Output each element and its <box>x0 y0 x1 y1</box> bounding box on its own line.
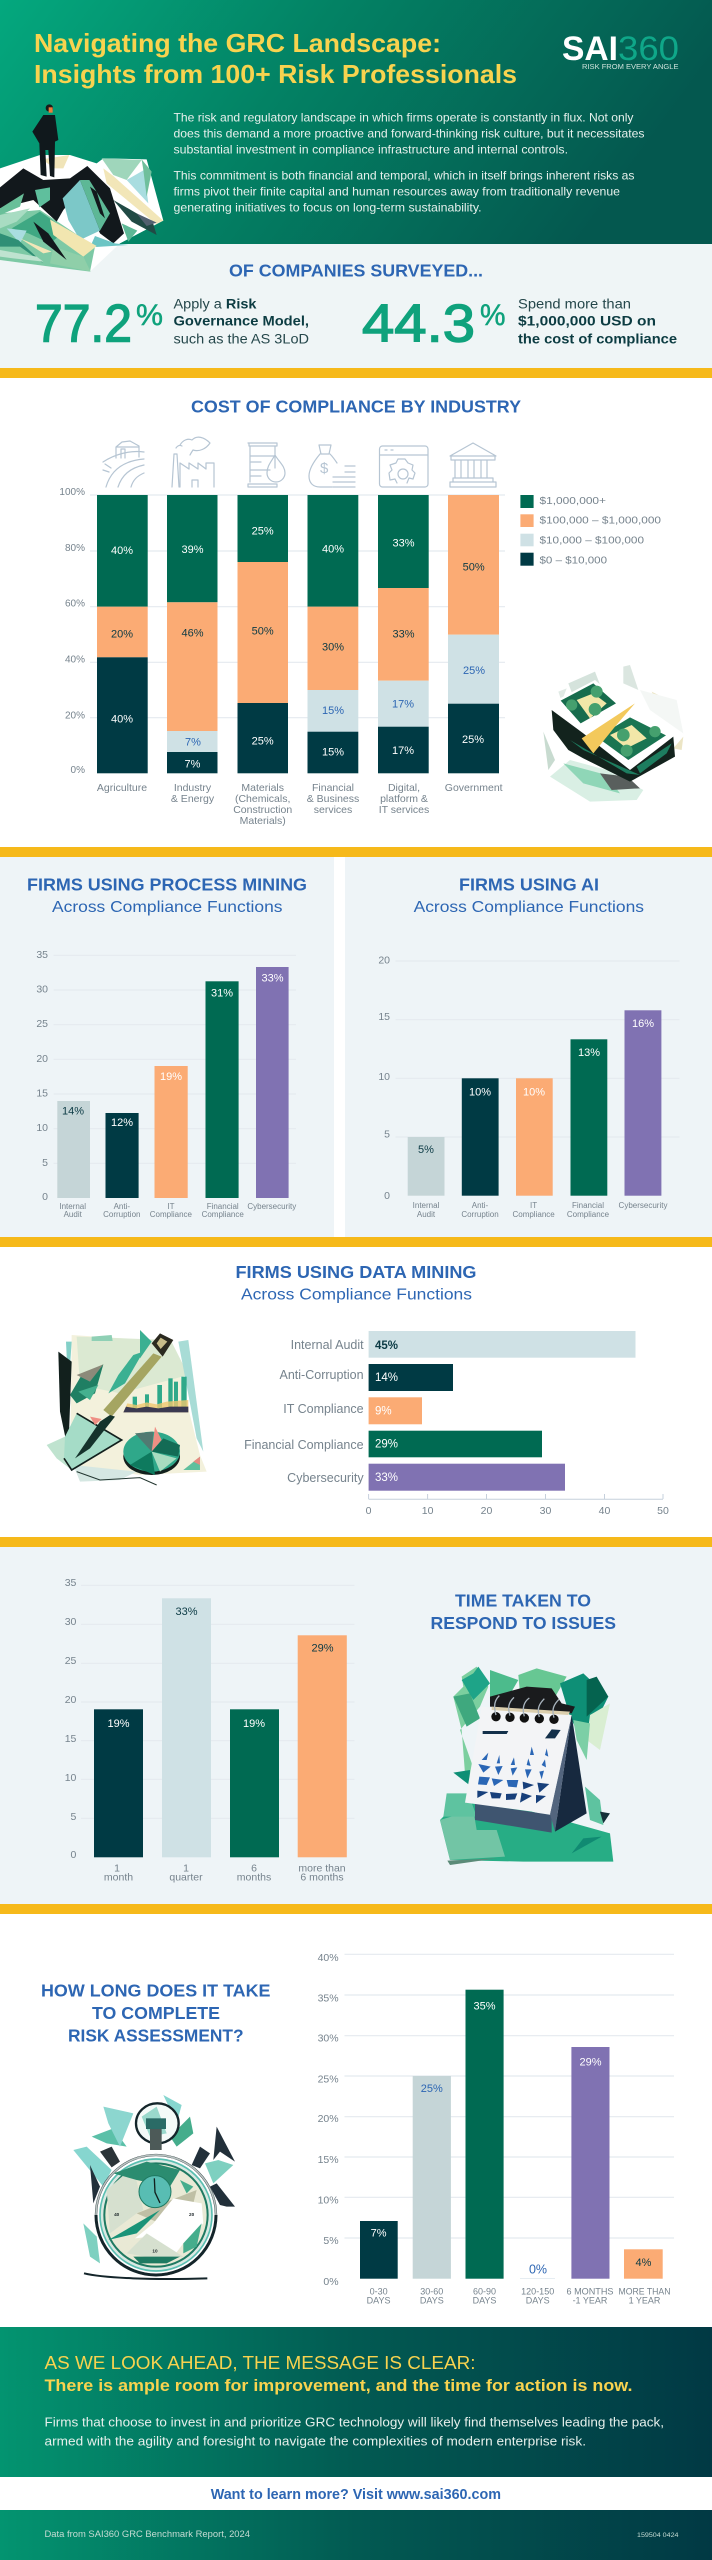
bar chart: Cybersecurity <box>247 1202 296 1211</box>
bar chart: 0% <box>529 2262 547 2276</box>
illustration: shovel and charts <box>47 1330 207 1485</box>
bar chart: Financial <box>572 1201 604 1210</box>
bar chart: 14% <box>62 1106 84 1118</box>
y axis: 100% <box>59 487 85 498</box>
stat: 44.3%: 44.3 <box>362 295 475 354</box>
heading <box>41 1981 270 2045</box>
icon: money bag <box>309 445 355 487</box>
bar chart: 1 YEAR <box>629 2296 661 2306</box>
heading: FIRMS USING AI <box>459 875 599 895</box>
bar chart: Corruption <box>103 1210 140 1219</box>
heading: FIRMS USING DATA MINING <box>236 1262 476 1282</box>
bar chart: 29% <box>311 1642 334 1654</box>
bar chart: 120-150 <box>521 2286 554 2296</box>
y axis: 80% <box>65 543 85 554</box>
intro text: The risk and regulatory landscape in which firms operate is constantly in flux. Not only <box>174 111 634 125</box>
bar: Industry & Energy: 46% <box>181 627 204 639</box>
bar chart: 20% <box>318 2113 339 2125</box>
illustration: stack of money <box>543 665 683 802</box>
bar: Materials: Construction <box>233 804 292 816</box>
bar chart: 60-90 <box>473 2286 496 2296</box>
call to action: Want to learn more? Visit www.sai360.com <box>211 2486 501 2503</box>
stat: 44.3%: Spend more than <box>518 296 631 311</box>
panel: of companies surveyed <box>0 244 712 368</box>
illustration: man on mountain <box>0 104 163 272</box>
bar chart: 10 <box>378 1071 390 1083</box>
stat: 44.3% <box>362 295 678 354</box>
intro text: substantial investment in compliance infrastructure and internal controls. <box>174 142 568 156</box>
bar chart: 40 <box>599 1505 610 1517</box>
bar: Financial & Business services: 40% <box>322 544 344 556</box>
icon: browser gear <box>380 446 428 487</box>
bar chart: Anti-Corruption <box>280 1368 364 1382</box>
icon: man <box>32 104 58 177</box>
y axis <box>59 487 85 776</box>
bar chart: Financial Compliance <box>244 1438 364 1452</box>
bar: Digital, platform & IT services <box>378 495 429 816</box>
bar: Agriculture: 20% <box>111 629 133 641</box>
bar chart: 6 months <box>300 1872 344 1884</box>
bar: Financial & Business services: services <box>314 804 352 816</box>
bar: Digital, platform & IT services: 17% <box>392 745 414 757</box>
bar chart: 10 <box>36 1122 48 1134</box>
bar chart: 0 <box>42 1191 48 1203</box>
illustration: stopwatch <box>73 2095 235 2279</box>
bar chart: 30-60 <box>420 2286 443 2296</box>
icon: farm <box>103 441 144 487</box>
bar chart: 25 <box>36 1018 48 1030</box>
bar chart: 35 <box>65 1577 77 1589</box>
stat: 77.2%: Governance Model, <box>174 314 309 329</box>
bar chart: 6 MONTHS <box>566 2286 614 2296</box>
bar chart: 33% <box>261 972 284 984</box>
bar chart: 10% <box>523 1086 545 1098</box>
legend: $0 – $10,000 <box>540 554 607 566</box>
logo: SAI360: 360 <box>618 30 679 68</box>
document code: 159504 0424 <box>637 2532 679 2539</box>
illustration: stopwatch: 40 <box>114 2212 120 2217</box>
logo: SAI360 <box>562 30 679 71</box>
bar chart: 30% <box>318 2032 339 2044</box>
bar chart: 30 <box>540 1505 551 1517</box>
title: Navigating the GRC Landscape: <box>34 28 441 58</box>
bar chart: 15% <box>318 2154 339 2166</box>
bar chart: more than <box>298 1862 346 1874</box>
bar chart: 15 <box>378 1011 390 1023</box>
bar chart: 5 <box>71 1811 77 1823</box>
bar: Materials <box>233 495 292 827</box>
bar chart: 45% <box>375 1340 398 1352</box>
icon: government building <box>450 443 496 487</box>
bar: Agriculture: 40% <box>111 545 133 557</box>
bar chart: 7% <box>371 2228 387 2240</box>
panel: firms using data mining <box>47 1262 669 1517</box>
bar: Industry & Energy: & Energy <box>171 793 215 805</box>
bar chart: 12% <box>111 1117 133 1129</box>
bar chart: 5% <box>418 1144 434 1156</box>
chart: stacked bars <box>59 487 505 827</box>
bar chart: 15 <box>36 1088 48 1100</box>
legend: $100,000 – $1,000,000 <box>540 514 661 526</box>
heading: FIRMS USING PROCESS MINING <box>27 875 307 895</box>
bar chart: 30 <box>65 1616 77 1628</box>
bar: Industry & Energy: 7% <box>185 759 201 771</box>
bar: Materials: (Chemicals, <box>235 793 290 805</box>
icon: barrel <box>248 443 285 487</box>
y axis: 20% <box>65 710 85 722</box>
bar chart: MORE THAN <box>618 2286 670 2296</box>
bar chart <box>244 1331 669 1517</box>
bar: Financial & Business services: Financial <box>312 782 354 794</box>
bar: Government: 25% <box>462 734 484 746</box>
bar: Materials: 25% <box>252 736 274 748</box>
stat: 77.2%: such as the AS 3LoD <box>174 331 309 346</box>
bar chart: 31% <box>211 988 233 1000</box>
panel: how long does it take to complete risk assessment <box>41 1952 674 2306</box>
title: Insights from 100+ Risk Professionals <box>34 59 517 89</box>
bar chart: 10 <box>422 1505 434 1517</box>
legend: $10,000 – $100,000 <box>540 534 644 546</box>
icon: money bag: $ <box>320 460 329 477</box>
panel: firms using AI <box>345 857 712 1237</box>
bar: Financial & Business services: 15% <box>322 705 344 717</box>
bar: Materials: 50% <box>252 626 274 638</box>
panel: firms using process mining <box>0 857 334 1237</box>
bar chart: 20 <box>36 1053 48 1065</box>
bar: Materials: 25% <box>252 525 274 537</box>
bar chart: Cybersecurity <box>287 1471 364 1485</box>
bar chart: 5 <box>42 1157 48 1169</box>
stat: 77.2%: 77.2 <box>35 295 132 354</box>
bar chart: 25% <box>318 2074 339 2086</box>
illustration: calendar <box>440 1667 613 1865</box>
closing text <box>44 2415 664 2448</box>
bar chart: Compliance <box>202 1210 244 1219</box>
bar chart: months <box>237 1872 271 1884</box>
bar chart: DAYS <box>526 2296 550 2306</box>
bar: Materials: Materials <box>241 782 284 794</box>
icon: industry <box>172 437 214 487</box>
illustration: stopwatch: 10 <box>152 2249 158 2254</box>
heading: TIME TAKEN TO <box>455 1591 591 1611</box>
bar chart: 19% <box>243 1718 265 1730</box>
heading: RISK ASSESSMENT? <box>68 2025 244 2045</box>
bar chart: 13% <box>578 1047 600 1059</box>
bar chart: 25 <box>65 1655 77 1667</box>
bar: Agriculture <box>97 495 148 794</box>
legend: $1,000,000+ <box>540 495 606 507</box>
heading: Across Compliance Functions <box>52 899 282 916</box>
bar: Industry & Energy: 7% <box>185 737 201 749</box>
bar chart: 0 <box>384 1190 390 1202</box>
bar chart: Corruption <box>461 1210 499 1219</box>
stat: 77.2% <box>35 295 309 354</box>
heading <box>27 875 307 916</box>
heading: Across Compliance Functions <box>241 1286 472 1303</box>
intro text: does this demand a more proactive and forward-thinking risk culture, but it necessitates <box>174 126 644 140</box>
bar: Financial & Business services: 15% <box>322 746 344 758</box>
y axis: 40% <box>65 654 85 666</box>
bar: Industry & Energy: 39% <box>181 544 204 556</box>
stat: 77.2%: % <box>136 299 163 332</box>
bar: Materials: Materials) <box>240 815 286 827</box>
y axis: 60% <box>65 598 85 610</box>
bar chart: 1 <box>114 1862 120 1874</box>
heading: TO COMPLETE <box>92 2003 220 2023</box>
bar chart: 4% <box>636 2257 652 2269</box>
bar chart: Anti- <box>472 1201 489 1210</box>
bar chart: 35% <box>318 1992 339 2004</box>
logo: SAI360: RISK FROM EVERY ANGLE <box>582 64 679 71</box>
closing heading <box>44 2353 632 2395</box>
intro text <box>174 111 644 214</box>
bar chart: 5% <box>323 2235 339 2247</box>
bar chart: 9% <box>375 1406 392 1418</box>
bar: Government: 50% <box>463 562 485 574</box>
title <box>34 28 517 89</box>
heading: Across Compliance Functions <box>414 899 644 916</box>
stat: 44.3%: the cost of compliance <box>518 331 678 346</box>
heading <box>430 1591 616 1633</box>
bar chart: 10% <box>318 2194 339 2206</box>
bar chart: 33% <box>175 1606 198 1618</box>
bar chart: Audit <box>417 1210 436 1219</box>
bar chart: 1 <box>183 1862 189 1874</box>
illustration: stopwatch: 20 <box>189 2212 195 2217</box>
bar: Agriculture: Agriculture <box>97 782 147 794</box>
bar chart: Internal Audit <box>291 1338 364 1352</box>
bar: Financial & Business services <box>307 495 359 816</box>
heading <box>414 875 644 916</box>
bar chart: Financial <box>207 1202 239 1211</box>
bar: Digital, platform & IT services: 17% <box>392 699 414 711</box>
bar: Digital, platform & IT services: 33% <box>392 629 415 641</box>
bar chart: Anti- <box>114 1202 130 1211</box>
heading <box>236 1262 476 1303</box>
bar: Digital, platform & IT services: platform & <box>380 793 428 805</box>
closing text: armed with the agility and foresight to navigate the complexities of modern enterprise risk. <box>44 2433 586 2448</box>
bar chart: month <box>104 1872 133 1884</box>
closing heading: AS WE LOOK AHEAD, THE MESSAGE IS CLEAR: <box>44 2353 475 2373</box>
bar chart <box>378 954 680 1219</box>
bar: Financial & Business services: & Business <box>307 793 359 805</box>
intro text: This commitment is both financial and temporal, which in itself brings inherent risks as <box>174 168 634 182</box>
closing text: Firms that choose to invest in and prioritize GRC technology will likely find themselves leading the pack, <box>44 2415 664 2430</box>
bar chart: Compliance <box>512 1210 555 1219</box>
bar chart: 15 <box>65 1733 77 1745</box>
bar chart: 25% <box>421 2083 443 2095</box>
bar chart: 10 <box>65 1772 77 1784</box>
bar chart: DAYS <box>420 2296 444 2306</box>
bar chart: 6 <box>251 1862 257 1874</box>
panel: header <box>0 0 712 244</box>
bar chart: IT Compliance <box>283 1402 364 1416</box>
bar chart: 0% <box>323 2276 339 2288</box>
closing heading: There is ample room for improvement, and the time for action is now. <box>44 2377 632 2395</box>
bar chart: 29% <box>579 2056 602 2068</box>
heading: COST OF COMPLIANCE BY INDUSTRY <box>191 397 521 417</box>
bar: Agriculture: 40% <box>111 713 133 725</box>
bar chart: 10% <box>469 1086 491 1098</box>
bar chart: 20 <box>65 1694 77 1706</box>
bar chart: 19% <box>107 1718 130 1730</box>
stat: 44.3%: $1,000,000 USD on <box>518 314 656 329</box>
panel: time taken to respond to issues <box>0 1547 712 1904</box>
bar: Government: 25% <box>463 665 485 677</box>
bar: Government <box>445 495 503 794</box>
bar chart: 33% <box>375 1472 398 1484</box>
panel: closing message <box>0 2327 712 2477</box>
y axis: 0% <box>71 765 85 776</box>
bar: Digital, platform & IT services: Digital, <box>388 782 420 794</box>
bar: Digital, platform & IT services: 33% <box>392 537 415 549</box>
heading: RESPOND TO ISSUES <box>430 1613 616 1633</box>
stat: 44.3%: % <box>480 299 506 332</box>
bar chart: quarter <box>169 1872 203 1884</box>
bar chart: DAYS <box>473 2296 496 2306</box>
bar chart <box>318 1952 674 2306</box>
bar chart: Audit <box>64 1210 83 1219</box>
panel: footer <box>0 2510 712 2560</box>
bar: Industry & Energy: Industry <box>174 782 212 794</box>
bar chart: Internal <box>413 1201 440 1210</box>
bar chart: DAYS <box>367 2296 391 2306</box>
bar chart: 0 <box>366 1505 372 1517</box>
bar chart: 14% <box>375 1372 398 1384</box>
bar chart: 30 <box>36 984 48 996</box>
bar chart <box>65 1577 355 1884</box>
bar: Digital, platform & IT services: IT services <box>379 804 429 816</box>
intro text: generating initiatives to focus on long-term sustainability. <box>174 200 482 214</box>
bar chart: 35 <box>36 949 48 961</box>
stat: 77.2%: Apply a Risk <box>174 296 257 311</box>
bar chart: Internal <box>59 1202 86 1211</box>
bar: Industry & Energy <box>167 495 218 805</box>
logo: SAI360: SAI <box>562 30 618 68</box>
bar chart: 29% <box>375 1438 398 1450</box>
bar chart <box>36 949 296 1219</box>
panel: cost of compliance by industry <box>59 397 683 827</box>
bar chart: 0-30 <box>370 2286 388 2296</box>
bar: Government: Government <box>445 782 503 794</box>
bar chart: IT <box>530 1201 537 1210</box>
bar chart: 5 <box>384 1128 390 1140</box>
bar chart: 35% <box>473 2000 496 2012</box>
bar chart: 16% <box>632 1018 654 1030</box>
bar chart: 19% <box>160 1071 182 1083</box>
source note: Data from SAI360 GRC Benchmark Report, 2024 <box>44 2529 250 2540</box>
bar chart: 20 <box>481 1505 492 1517</box>
intro text: firms pivot their finite capital and human resources away from traditionally revenue <box>174 184 620 198</box>
bar chart: Cybersecurity <box>619 1201 667 1210</box>
heading: OF COMPANIES SURVEYED... <box>229 261 483 281</box>
heading: HOW LONG DOES IT TAKE <box>41 1981 270 2001</box>
bar: Financial & Business services: 30% <box>322 642 344 654</box>
bar chart: 20 <box>378 954 390 966</box>
bar chart: -1 YEAR <box>573 2296 608 2306</box>
bar chart: 0 <box>71 1849 77 1861</box>
bar chart: 50 <box>657 1505 669 1517</box>
bar chart: Compliance <box>150 1210 193 1219</box>
legend <box>520 495 661 566</box>
bar chart: 40% <box>318 1952 339 1964</box>
bar chart: IT <box>167 1202 175 1211</box>
bar chart: Compliance <box>567 1210 610 1219</box>
